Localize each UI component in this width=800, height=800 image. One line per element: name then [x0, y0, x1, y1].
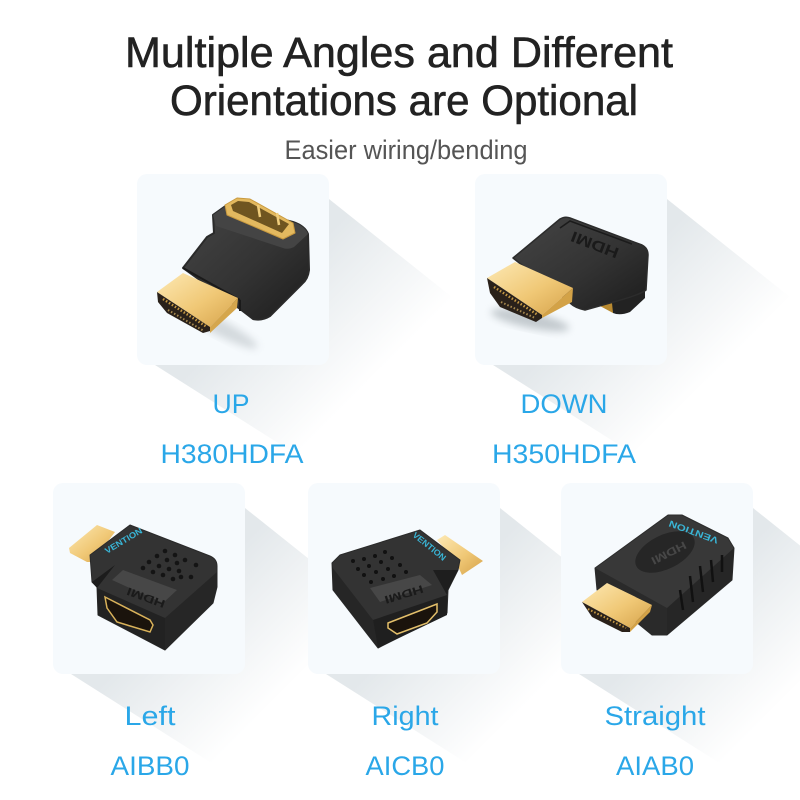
icon: right adapter logo — [370, 575, 432, 605]
icon: up adapter body — [183, 205, 309, 320]
icon: straight adapter plug — [582, 583, 652, 632]
label: right — [366, 701, 444, 781]
icon: right adapter brand text: VENTION — [411, 530, 448, 563]
panel shadow: straight — [579, 508, 800, 783]
panel: up adapter — [137, 174, 329, 365]
panel: straight adapter — [561, 483, 753, 674]
label: straight: AIAB0 — [616, 751, 694, 781]
icon: left adapter front — [97, 588, 165, 650]
title — [125, 29, 673, 125]
icon: up adapter ridge — [183, 268, 240, 311]
icon: up adapter collar — [213, 205, 308, 249]
label: left: Left — [124, 701, 176, 731]
icon: down adapter body — [513, 217, 648, 310]
icon: straight adapter body — [595, 515, 734, 635]
icon: straight adapter front — [595, 568, 667, 635]
label: straight: Straight — [604, 701, 706, 731]
label: up — [160, 389, 304, 469]
icon: left adapter brand text: VENTION — [103, 526, 144, 556]
icon: right adapter socket — [388, 604, 437, 634]
icon: right adapter logo: HDMI — [383, 582, 425, 605]
icon: left adapter logo: HDMI — [125, 585, 167, 609]
icon: left adapter plug — [69, 525, 115, 562]
label: left: AIBB0 — [110, 751, 190, 781]
label: up: H380HDFA — [160, 439, 304, 469]
icon: straight adapter logo: HDMI — [649, 538, 688, 566]
label: right: AICB0 — [366, 751, 444, 781]
label: left — [110, 701, 190, 781]
icon: left adapter vents — [141, 549, 198, 581]
icon: down adapter logo: HDMI — [569, 227, 621, 261]
label: up: UP — [212, 389, 250, 419]
panel shadow: right — [326, 508, 648, 783]
icon: right adapter vents — [351, 550, 408, 584]
title: Orientations are Optional — [170, 77, 638, 125]
icon: down adapter foot — [606, 280, 645, 314]
icon: left adapter socket — [105, 597, 153, 632]
icon: right adapter plug — [437, 535, 483, 575]
label: down: H350HDFA — [492, 439, 636, 469]
panel: left adapter — [53, 483, 245, 674]
icon: straight adapter ribs — [680, 555, 722, 610]
icon: straight adapter brand text: VENTION — [667, 518, 720, 546]
subtitle: Easier wiring/bending — [284, 135, 528, 165]
panel: down adapter — [475, 174, 667, 365]
label: right: Right — [372, 701, 439, 731]
icon: down adapter plug — [487, 262, 573, 322]
panel shadow: down — [493, 199, 800, 474]
icon: left adapter side — [165, 572, 217, 650]
label: down: DOWN — [520, 389, 608, 419]
label: down — [492, 389, 636, 469]
icon: left adapter body — [90, 525, 217, 650]
icon: down adapter gold tip — [600, 303, 613, 313]
panel shadow: left — [71, 508, 393, 783]
panel shadow: up — [155, 199, 477, 474]
icon: straight adapter logo — [629, 523, 701, 581]
title: Multiple Angles and Different — [125, 29, 673, 77]
icon: up adapter socket — [225, 198, 295, 239]
icon: down adapter logo — [560, 221, 632, 261]
icon: right adapter notch — [433, 570, 458, 595]
icon: straight adapter side — [667, 548, 734, 635]
icon: left adapter notch — [92, 565, 115, 588]
icon: left adapter logo — [112, 570, 177, 609]
icon: up adapter plug — [157, 273, 238, 333]
icon: right adapter body — [332, 530, 460, 648]
icon: right adapter left side — [332, 567, 378, 648]
label: straight — [604, 701, 706, 781]
icon: right adapter front — [373, 595, 447, 648]
panel: right adapter — [308, 483, 500, 674]
